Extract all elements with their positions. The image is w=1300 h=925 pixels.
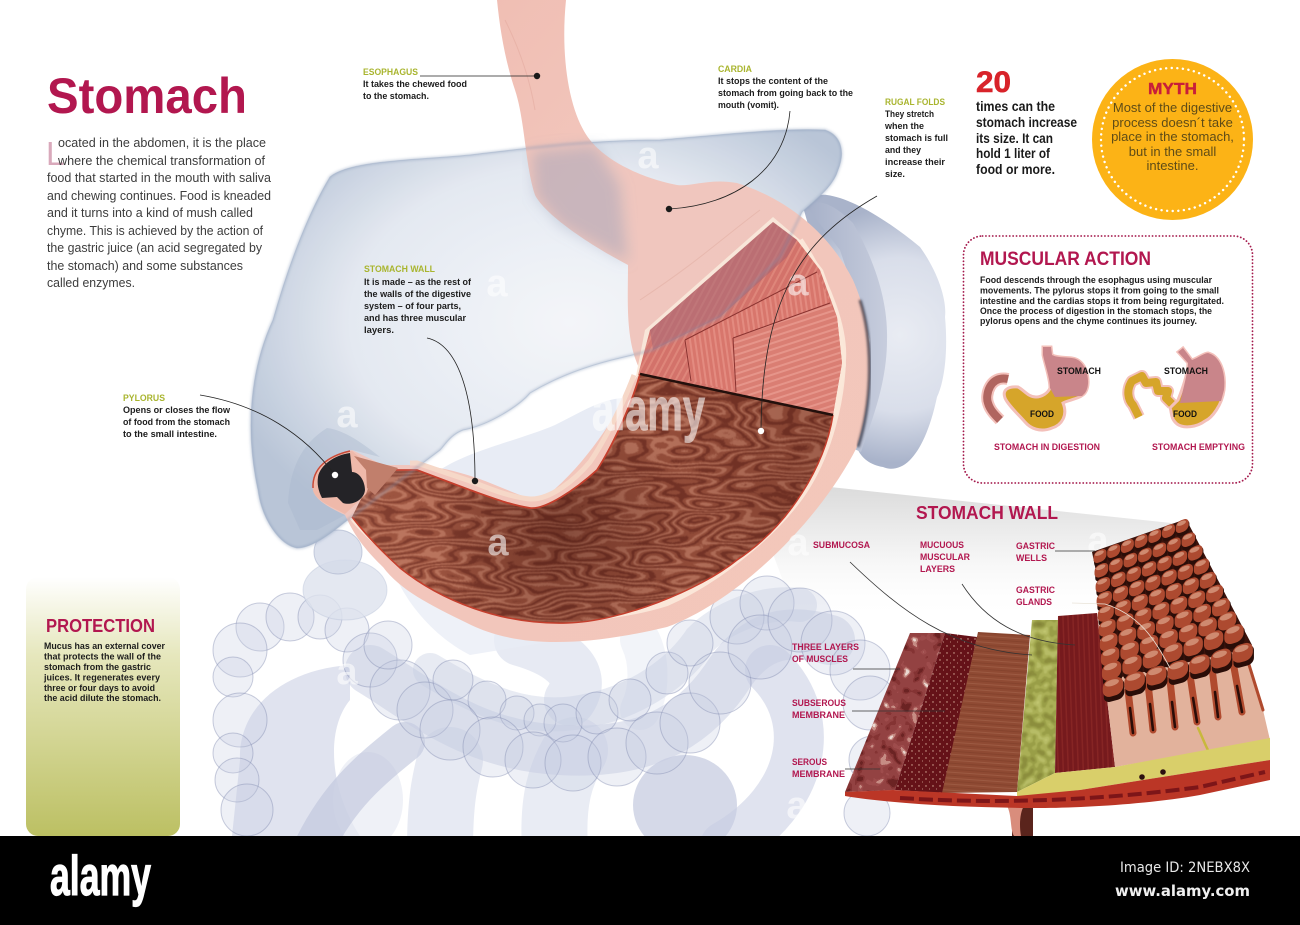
callout: esophagus: It takes the chewed food — [363, 79, 467, 90]
rugal folds lining — [352, 372, 834, 624]
watermarks: a — [1236, 130, 1258, 172]
watermarks: a — [787, 522, 809, 564]
callout: rugal folds: increase their — [885, 157, 945, 168]
panel: protection: that protects the wall of the — [44, 652, 161, 662]
callout: pylorus: Opens or closes the flow — [123, 405, 231, 416]
muscle layer — [942, 632, 1030, 793]
panel: muscular action — [964, 236, 1252, 483]
stomach wall perspective wedge — [745, 478, 1190, 790]
upper wall edge — [410, 375, 634, 499]
fact: 20 times: times can the — [976, 99, 1055, 114]
stomach wall labels: MEMBRANE — [792, 710, 845, 721]
panel: protection: stomach from the gastric — [44, 662, 151, 673]
panel: myth: Most of the digestive — [1113, 100, 1232, 115]
dark red layer — [1055, 613, 1115, 773]
watermarks: a — [487, 785, 509, 827]
panel: protection: Mucus has an external cover — [44, 641, 165, 652]
callout: cardia: It stops the content of the — [718, 76, 828, 87]
description text: Food descends through the esophagus using muscular — [980, 275, 1212, 286]
stomach wall labels: GASTRIC — [1016, 541, 1055, 552]
illustration: liver back — [251, 130, 842, 548]
panel: protection: PROTECTION — [46, 616, 155, 636]
stomach wall labels: GLANDS — [1016, 597, 1052, 608]
diagram: stomach wall cross-section — [840, 517, 1270, 836]
callout: cardia: CARDIA — [718, 64, 752, 75]
intro text block: and it turns into a kind of mush called — [47, 205, 253, 220]
fact: 20 times: hold 1 liter of — [976, 146, 1050, 161]
diagram labels: FOOD — [1030, 409, 1054, 420]
stomach wall labels: MUSCULAR — [920, 552, 970, 563]
description text — [980, 275, 1224, 327]
intro text block — [46, 135, 272, 290]
callout: stomach wall: It is made – as the rest of — [364, 277, 472, 288]
stomach wall labels: SUBSEROUS — [792, 698, 846, 709]
panel: protection: the acid dilute the stomach. — [44, 693, 161, 704]
callout: rugal folds — [758, 97, 948, 434]
diagram labels: STOMACH — [1164, 366, 1208, 377]
watermarks: a — [637, 135, 659, 177]
footer bar: Image ID: 2NEBX8X — [1120, 860, 1250, 876]
stomach wall labels: SUBMUCOSA — [813, 540, 870, 551]
callout: pylorus: of food from the stomach — [123, 417, 230, 428]
villi base — [1092, 519, 1252, 700]
panel: protection: three or four days to avoid — [44, 683, 155, 694]
callout: pylorus: PYLORUS — [123, 393, 165, 404]
illustration: spleen — [803, 195, 946, 469]
yellow submucosa band — [1017, 738, 1270, 798]
description text: intestine and the cardias stops it from being regurgitated. — [980, 296, 1224, 307]
diagram labels — [1030, 366, 1208, 420]
intro text block: where the chemical transformation of — [57, 153, 265, 168]
intro text block: the stomach) and some substances — [47, 258, 243, 273]
diagram: stomach in digestion — [987, 347, 1088, 430]
watermarks — [24, 130, 1258, 827]
stomach body and esophagus — [313, 0, 870, 642]
fact: 20 times: stomach increase — [976, 115, 1077, 130]
callout: esophagus — [363, 67, 540, 102]
panel: myth: place in the stomach, — [1111, 129, 1234, 144]
panel: myth: MYTH — [1148, 81, 1197, 98]
intro text block: chyme. This is achieved by the action of — [47, 223, 263, 238]
intro text block: ocated in the abdomen, it is the place — [58, 135, 266, 150]
illustration: pylorus — [288, 428, 398, 530]
panel: myth — [1092, 59, 1253, 220]
fact: 20 times: its size. It can — [976, 131, 1053, 146]
panel: protection: juices. It regenerates every — [43, 672, 161, 684]
red base band — [845, 760, 1270, 808]
villi rows — [1093, 517, 1254, 704]
illustration: pancreas — [303, 398, 622, 655]
intro text block: and chewing continues. Food is kneaded — [47, 188, 271, 203]
watermarks: a — [1087, 779, 1109, 821]
watermarks: a — [336, 394, 358, 436]
intro text block: L — [46, 135, 64, 172]
callout: stomach wall: STOMACH WALL — [364, 264, 435, 275]
watermarks: a — [786, 785, 808, 827]
diagram labels: STOMACH — [1057, 366, 1101, 377]
intro text block: the gastric juice (an acid segregated by — [47, 240, 262, 255]
pink mucosa — [1097, 613, 1270, 767]
watermarks: alamy — [890, 636, 1000, 703]
callout: cardia: mouth (vomit). — [718, 100, 779, 111]
panel: myth: process doesn´t take — [1112, 115, 1233, 130]
diagram: stomach emptying — [1128, 348, 1224, 427]
panel: myth: but in the small — [1129, 144, 1216, 159]
illustration: intestines — [213, 576, 897, 855]
panel: protection — [26, 577, 180, 836]
description text: Once the process of digestion in the stomach stops, the — [980, 306, 1212, 317]
diagram labels: FOOD — [1173, 409, 1197, 420]
stomach wall labels: SEROUS — [792, 757, 827, 768]
stomach wall labels: OF MUSCLES — [792, 654, 848, 665]
intro text block: called enzymes. — [47, 275, 135, 290]
heading: muscular action: MUSCULAR ACTION — [980, 249, 1151, 270]
watermarks: a — [1087, 520, 1109, 562]
stomach wall labels: MUCUOUS — [920, 540, 964, 551]
illustration: stomach — [313, 0, 870, 642]
title: Stomach — [47, 68, 247, 124]
submucosa layer — [895, 633, 977, 793]
stomach wall labels: THREE LAYERS — [792, 642, 859, 653]
stomach wall labels: MEMBRANE — [792, 769, 845, 780]
fact: 20 times — [976, 66, 1077, 177]
callout: rugal folds: stomach is full — [885, 133, 948, 144]
description text: pylorus opens and the chyme continues its journey. — [980, 316, 1197, 327]
watermarks: a — [487, 522, 509, 564]
fact: 20 times: 20 — [976, 66, 1011, 99]
panel: myth: intestine. — [1146, 158, 1199, 173]
fact: 20 times: food or more. — [976, 162, 1055, 177]
callout: rugal folds: size. — [885, 169, 905, 180]
callout: cardia — [666, 64, 853, 212]
callout: stomach wall: and has three muscular — [364, 313, 466, 324]
callout: pylorus: to the small intestine. — [123, 429, 217, 440]
callout: stomach wall: system – of four parts, — [364, 301, 461, 312]
footer bar: www.alamy.com — [1115, 882, 1250, 900]
callout: stomach wall — [364, 264, 478, 484]
callout: pylorus — [123, 393, 338, 478]
callout: rugal folds: and they — [885, 145, 922, 156]
callout: rugal folds: when the — [884, 121, 924, 132]
watermarks: a — [787, 262, 809, 304]
stomach wall labels — [792, 540, 1055, 780]
serous membrane layer — [845, 633, 945, 792]
villi cross-section — [1128, 655, 1263, 762]
callout: stomach wall: the walls of the digestive — [364, 289, 471, 300]
footer bar — [0, 836, 1300, 925]
callout: esophagus: ESOPHAGUS — [363, 67, 418, 78]
watermarks: a — [336, 651, 358, 693]
diagram captions — [994, 442, 1245, 453]
diagram captions: STOMACH EMPTYING — [1152, 442, 1245, 453]
diagram captions: STOMACH IN DIGESTION — [994, 442, 1100, 453]
callout: rugal folds: RUGAL FOLDS — [885, 97, 945, 108]
fat layer — [1017, 620, 1058, 792]
callout: rugal folds: They stretch — [885, 109, 934, 120]
stomach wall labels: WELLS — [1016, 553, 1047, 564]
watermarks: alamy — [592, 376, 705, 443]
description text: movements. The pylorus stops it from going to the small — [980, 286, 1219, 296]
stomach wall leader lines — [845, 551, 1170, 769]
illustration: liver translucent overlay — [251, 130, 842, 548]
callout: stomach wall: layers. — [364, 325, 394, 336]
watermarks: a — [486, 263, 508, 305]
footer bar: alamy — [50, 844, 151, 907]
muscle layers — [636, 217, 846, 418]
watermarks: a — [24, 655, 46, 697]
callout: esophagus: to the stomach. — [363, 91, 429, 102]
heading: stomach wall: STOMACH WALL — [916, 503, 1058, 523]
intro text block: food that started in the mouth with saliva — [47, 170, 272, 185]
callout: cardia: stomach from going back to the — [718, 88, 853, 99]
stalk — [1012, 806, 1033, 836]
stomach wall labels: GASTRIC — [1016, 585, 1055, 596]
stomach wall labels: LAYERS — [920, 564, 955, 575]
